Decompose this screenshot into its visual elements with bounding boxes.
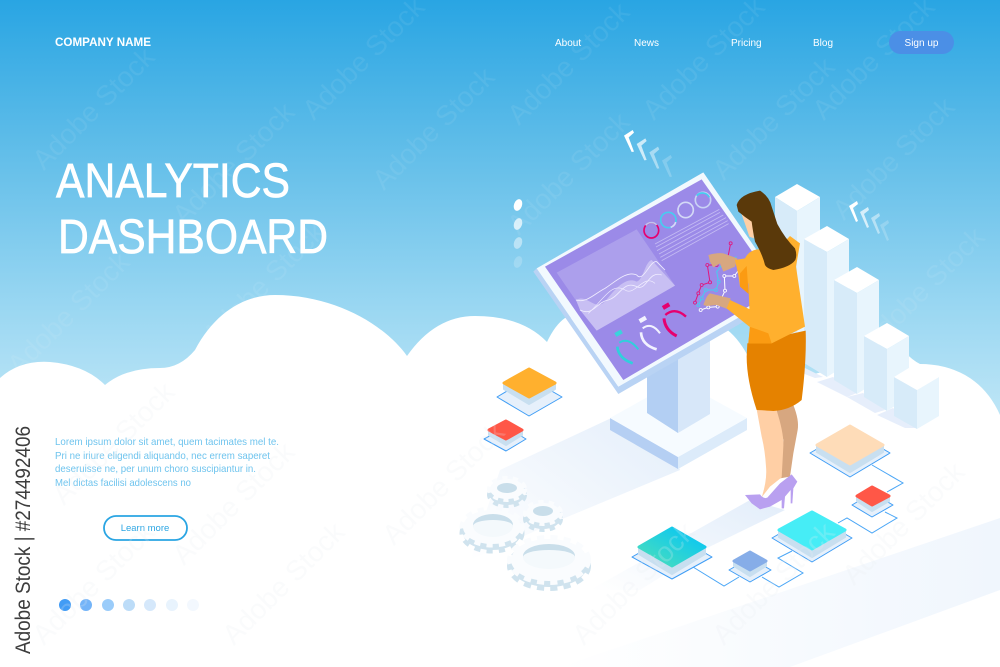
- watermark on white area: [26, 375, 971, 650]
- sky background: [0, 0, 1000, 440]
- learn more button: [104, 516, 187, 540]
- chevrons above screen: [624, 130, 672, 177]
- area chart: [557, 229, 675, 331]
- body text: Mel dictas facilisi adolescens no: [55, 477, 191, 489]
- watermark: Adobe Stock: Adobe Stock: [826, 90, 961, 225]
- hair: [737, 191, 796, 270]
- gear: right small: [526, 503, 560, 529]
- watermark on white area: Adobe Stock: [566, 515, 701, 650]
- touch screen: [533, 172, 785, 394]
- skirt: [747, 331, 806, 411]
- decorative dots left of screen: [512, 198, 524, 269]
- watermark on white area: Adobe Stock: [46, 375, 181, 510]
- screen display: [545, 179, 778, 380]
- lower hand: [703, 293, 731, 309]
- title: DASHBOARD: [58, 211, 328, 264]
- watermark: Adobe Stock: Adobe Stock: [1, 245, 136, 380]
- bar chart: isometric white columns: [775, 184, 939, 429]
- learn more button: Learn more: [121, 523, 169, 534]
- navigation: About: [555, 38, 581, 49]
- tile: red upper: [484, 421, 526, 451]
- title: ANALYTICS: [56, 155, 290, 208]
- connector lines: [693, 465, 903, 587]
- line charts: [693, 242, 740, 311]
- tile: cyan: [772, 512, 852, 562]
- watermark on white area: Adobe Stock: [216, 515, 351, 650]
- woman touching the screen: [703, 191, 806, 509]
- watermark on white area: Adobe Stock: [706, 515, 841, 650]
- sign up button: Sign up: [905, 38, 939, 49]
- navigation: Blog: [813, 38, 833, 49]
- watermark: Adobe Stock: Adobe Stock: [501, 0, 636, 130]
- face: [740, 210, 754, 238]
- screen frame side: [533, 268, 753, 394]
- navigation: Pricing: [731, 38, 762, 49]
- watermark: Adobe Stock: Adobe Stock: [196, 215, 331, 350]
- navigation: [555, 38, 833, 49]
- watermark: Adobe Stock: Adobe Stock: [501, 105, 636, 240]
- watermark: Adobe Stock: Adobe Stock: [366, 60, 501, 195]
- body text: Pri ne iriure eligendi aliquando, nec errem saperet: [55, 450, 270, 462]
- screen frame: [537, 172, 785, 387]
- jacket: [735, 236, 805, 343]
- tile: red lower: [852, 487, 893, 517]
- gear: top small: [490, 479, 524, 505]
- stock label: Adobe Stock | #274492406: [12, 426, 35, 654]
- watermark: Adobe Stock: Adobe Stock: [26, 40, 161, 175]
- cloud ground: [0, 295, 1000, 667]
- watermark on white area: Adobe Stock: [376, 415, 511, 550]
- floor shadows: [470, 400, 1000, 667]
- upper hand: [708, 253, 737, 272]
- tile: peach: [810, 426, 890, 477]
- body text: Lorem ipsum dolor sit amet, quem tacimates mel te.: [55, 436, 279, 448]
- chevrons right of bars: [849, 201, 889, 241]
- navigation: News: [634, 38, 659, 49]
- watermark: Adobe Stock: Adobe Stock: [856, 220, 991, 355]
- company name: COMPANY NAME: [55, 35, 151, 49]
- watermark: Adobe Stock: Adobe Stock: [706, 50, 841, 185]
- tile: blue: [729, 552, 771, 582]
- gauges: [614, 302, 686, 363]
- pagination dots: [59, 599, 199, 611]
- kiosk pedestal: [610, 340, 747, 469]
- tile: teal gradient: [632, 528, 712, 579]
- text lines: [655, 209, 729, 261]
- progress rings: [644, 192, 711, 238]
- legs and shoe: [745, 405, 798, 509]
- gear: large: [511, 539, 587, 587]
- gear: medium: [463, 510, 521, 550]
- body text: deseruisse ne, per unum choro suscipiantur in.: [55, 463, 256, 475]
- watermark: Adobe Stock: Adobe Stock: [166, 95, 301, 230]
- sign up button: [889, 31, 954, 54]
- tile: orange: [497, 369, 562, 416]
- watermark on white area: Adobe Stock: [26, 515, 161, 650]
- sleeve: [727, 300, 768, 333]
- watermark on white area: Adobe Stock: [836, 455, 971, 590]
- title: [56, 155, 328, 264]
- watermark on white area: Adobe Stock: [166, 435, 301, 570]
- watermark: Adobe Stock: [1, 0, 991, 380]
- body text: [55, 436, 279, 489]
- gears: [463, 479, 587, 587]
